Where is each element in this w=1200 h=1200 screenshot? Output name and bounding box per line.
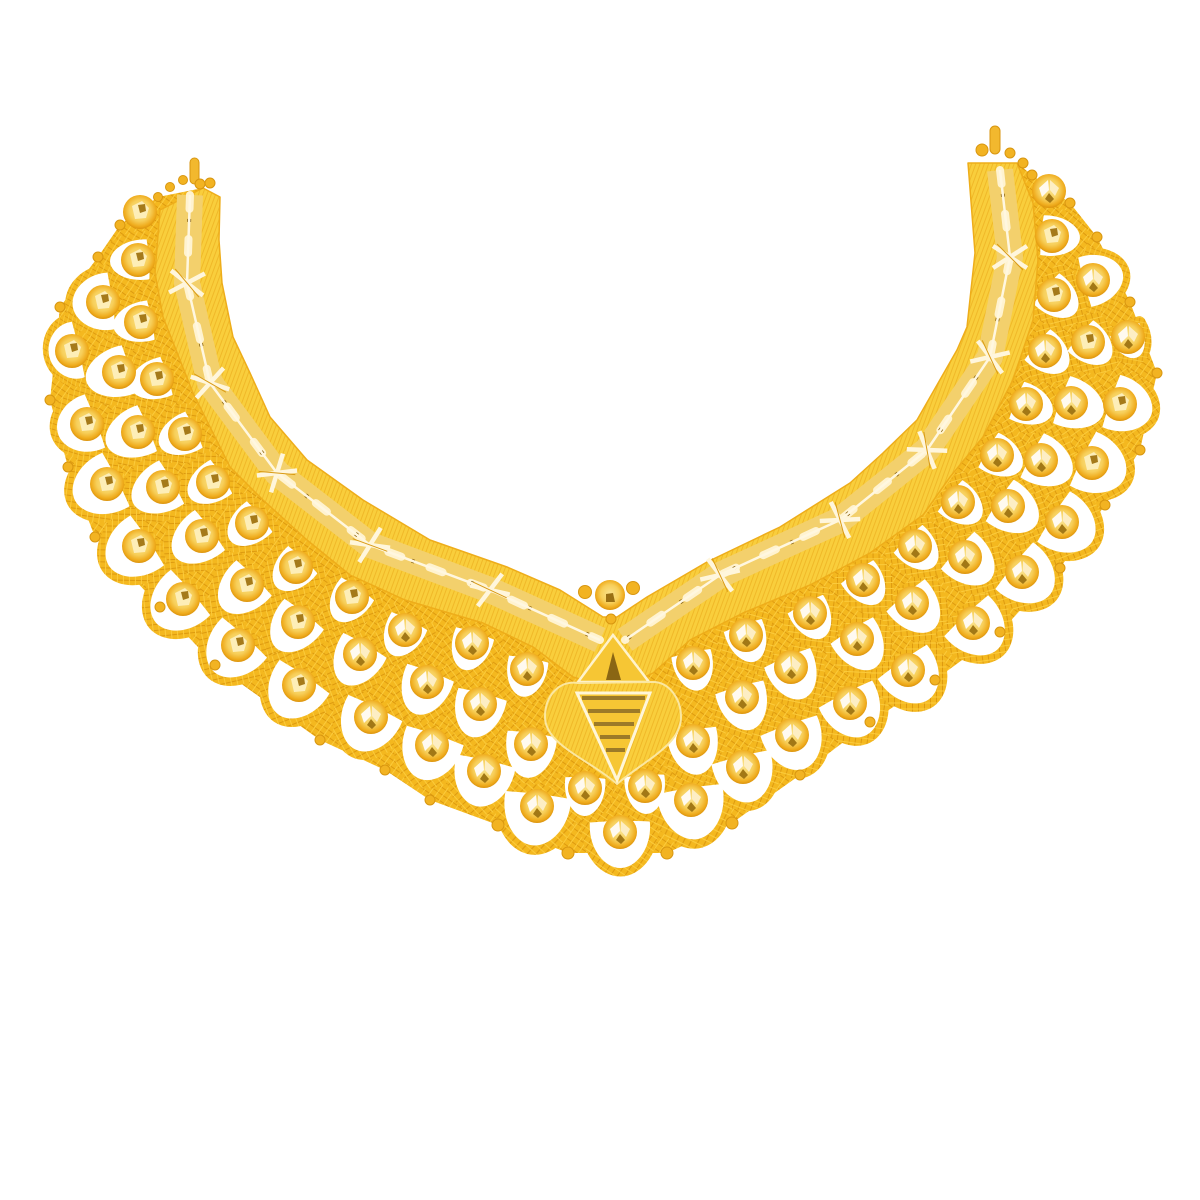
right clasp loop and granules	[976, 126, 1037, 180]
pendant stripes	[582, 696, 645, 752]
heart pendant	[545, 682, 681, 784]
lace: filigree base web	[50, 163, 1157, 853]
necklace	[43, 126, 1162, 869]
band highlight line	[187, 170, 1010, 640]
granules along the scalloped edge	[45, 198, 1162, 859]
band dark flecks	[187, 170, 1010, 640]
collar band	[155, 163, 1038, 690]
band cross ornaments	[169, 244, 1027, 608]
band leaf highlights	[187, 170, 1010, 640]
beads	[55, 174, 1145, 849]
left clasp loop and granules	[154, 158, 215, 202]
band base	[155, 163, 1038, 690]
lace openings	[43, 215, 1160, 869]
centre top beads	[578, 580, 640, 624]
lace: scalloped rope loops	[43, 215, 1160, 869]
upper triangle ornament	[578, 635, 649, 682]
band engraved centre track	[187, 170, 1010, 640]
pendant inner triangle	[577, 693, 650, 780]
